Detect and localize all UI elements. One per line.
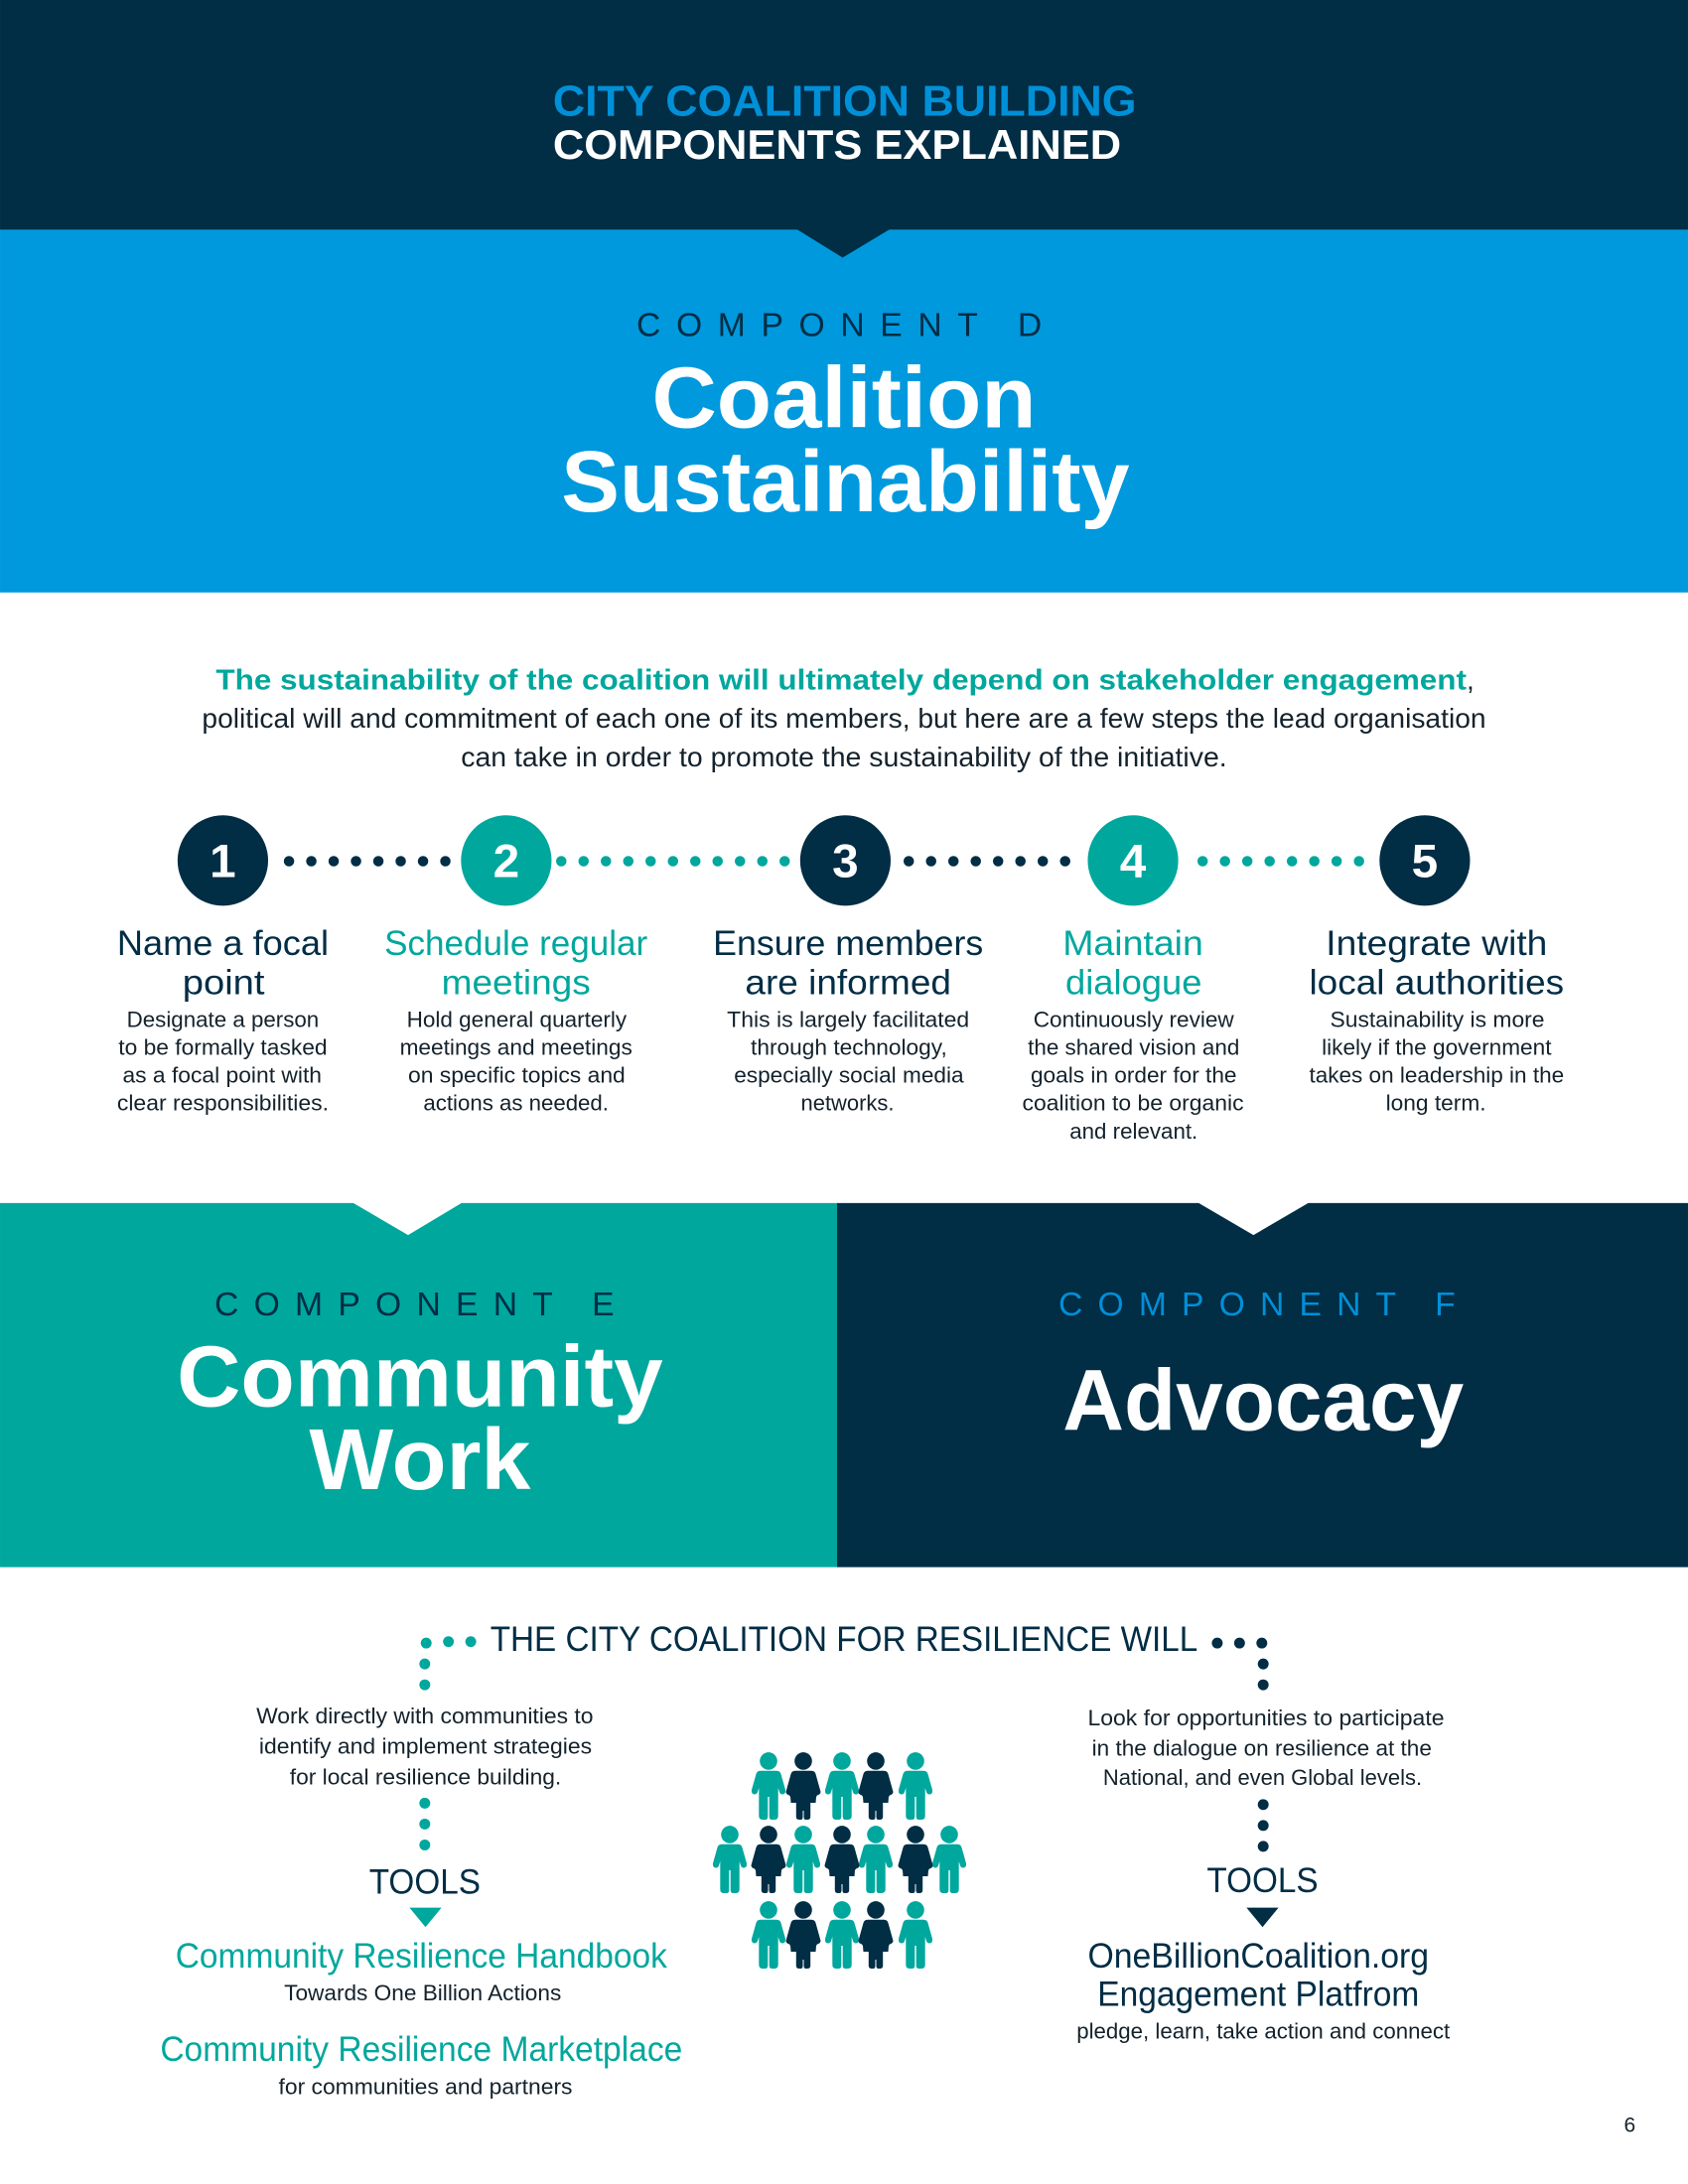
advocacy description: National, and even Global levels.: [1103, 1765, 1422, 1790]
step 1 heading: point: [183, 963, 265, 1002]
icon: people group: [713, 1752, 966, 1969]
component F heading: Advocacy: [1062, 1352, 1464, 1448]
tool: engagement platform: pledge, learn, take action and connect: [1076, 2018, 1451, 2043]
step 3 description: This is largely facilitated: [727, 1008, 969, 1032]
panel: component E: [0, 1201, 837, 1568]
step 2 heading: Schedule regular: [384, 924, 648, 963]
step 2 heading: meetings: [442, 963, 591, 1002]
title: [553, 77, 1137, 168]
step 1 heading: [117, 924, 329, 1002]
step 4: [1023, 815, 1244, 1144]
step 2 description: [400, 1008, 633, 1116]
step 1 description: to be formally tasked: [118, 1035, 328, 1060]
intro text block: [202, 664, 1486, 772]
community work description: [256, 1704, 594, 1790]
right tools arrow: [1246, 1908, 1279, 1927]
step 5 description: Sustainability is more: [1331, 1008, 1545, 1032]
tool: handbook: Community Resilience Handbook: [176, 1937, 667, 1976]
step 5 badge: [1379, 815, 1470, 905]
step 1 heading: Name a focal: [117, 924, 329, 963]
notch E: [351, 1201, 464, 1235]
step 4 heading: Maintain: [1062, 924, 1203, 963]
advocacy description: in the dialogue on resilience at the: [1092, 1736, 1432, 1761]
title: COMPONENTS EXPLAINED: [553, 121, 1121, 168]
tool: marketplace: [160, 2030, 682, 2099]
step 1: [117, 815, 329, 1116]
step 4 description: goals in order for the: [1031, 1063, 1237, 1088]
tool: engagement platform: OneBillionCoalition.org: [1087, 1937, 1429, 1976]
tool: handbook: [176, 1937, 667, 2005]
step 3 badge: [800, 815, 891, 905]
step 3 heading: are informed: [745, 963, 951, 1002]
step 3 description: through technology,: [751, 1035, 947, 1060]
step 4 description: Continuously review: [1034, 1008, 1235, 1032]
step 4 badge: 4: [1120, 836, 1147, 888]
tool: marketplace: for communities and partners: [279, 2074, 572, 2099]
page number: 6: [1623, 2114, 1635, 2136]
advocacy description: Look for opportunities to participate: [1087, 1706, 1445, 1730]
dotted connector 4 to 5: [1202, 858, 1359, 865]
community work description: for local resilience building.: [290, 1765, 561, 1790]
step 1 description: as a focal point with: [122, 1063, 322, 1088]
step 1 description: [117, 1008, 329, 1116]
header pointer arrow: [795, 228, 892, 257]
left tools arrow: [409, 1908, 442, 1927]
left tools label: TOOLS: [369, 1863, 481, 1902]
step 2 heading: [384, 924, 648, 1002]
step 3: [713, 815, 983, 1116]
step 3 badge: 3: [832, 836, 859, 888]
dotted connector left lower: [419, 1798, 430, 1850]
intro text block: can take in order to promote the sustainability of the initiative.: [461, 742, 1227, 772]
dotted connector left top: [419, 1636, 477, 1691]
step 5: [1309, 815, 1564, 1116]
panel: component D: [0, 228, 1688, 593]
step 3 description: [727, 1008, 969, 1116]
step 4 description: [1023, 1008, 1244, 1144]
step 4 heading: [1062, 924, 1203, 1002]
intro text block: ,: [1467, 664, 1475, 695]
step 1 badge: [178, 815, 268, 905]
step 2: [384, 815, 648, 1116]
step 5 heading: [1309, 924, 1564, 1002]
step 3 description: especially social media: [734, 1063, 964, 1088]
component E label: COMPONENT E: [214, 1287, 615, 1323]
step 2 badge: 2: [493, 836, 519, 888]
step 5 heading: local authorities: [1309, 963, 1564, 1002]
notch F: [1196, 1201, 1311, 1235]
component E heading: Community: [177, 1329, 663, 1426]
advocacy description: [1087, 1706, 1445, 1790]
step 1 description: Designate a person: [127, 1008, 319, 1032]
step 3 description: networks.: [801, 1091, 894, 1116]
tool: marketplace: Community Resilience Marketplace: [160, 2030, 682, 2069]
step 4 description: and relevant.: [1069, 1119, 1197, 1144]
step 3 heading: Ensure members: [713, 924, 983, 963]
step 4 description: the shared vision and: [1028, 1035, 1239, 1060]
step 5 heading: Integrate with: [1326, 924, 1547, 963]
community work description: identify and implement strategies: [259, 1734, 592, 1759]
dotted connector 2 to 3: [561, 858, 785, 865]
step 5 badge: 5: [1412, 836, 1438, 888]
step 5 description: takes on leadership in the: [1309, 1063, 1564, 1088]
tool: handbook: Towards One Billion Actions: [284, 1980, 561, 2005]
title: CITY COALITION BUILDING: [553, 77, 1137, 125]
step 4 description: coalition to be organic: [1023, 1091, 1244, 1116]
step 2 badge: [461, 815, 551, 905]
tool: engagement platform: [1076, 1937, 1451, 2043]
tool: engagement platform: Engagement Platfrom: [1097, 1975, 1419, 2013]
component F label: COMPONENT F: [1058, 1287, 1456, 1323]
dotted connector right lower: [1258, 1799, 1269, 1851]
step 1 badge: 1: [210, 836, 236, 888]
header band: [0, 0, 1688, 229]
step 5 description: long term.: [1386, 1091, 1486, 1116]
step 3 heading: [713, 924, 983, 1002]
section heading: THE CITY COALITION FOR RESILIENCE WILL: [491, 1620, 1197, 1659]
component D heading: Coalition: [651, 350, 1037, 447]
component E heading: Work: [309, 1412, 531, 1508]
dotted connector 3 to 4: [909, 858, 1065, 865]
dotted connector 1 to 2: [289, 858, 447, 865]
component D heading: Sustainability: [561, 434, 1130, 530]
step 4 badge: [1087, 815, 1179, 905]
step 2 description: on specific topics and: [408, 1063, 626, 1088]
intro text block: The sustainability of the coalition will ultimately depend on stakeholder engagement: [215, 664, 1467, 696]
step 4 heading: dialogue: [1065, 963, 1201, 1002]
intro text block: political will and commitment of each one of its members, but here are a few steps the lead organisation: [202, 703, 1486, 734]
left column: community work: [160, 1704, 682, 2099]
step 2 description: meetings and meetings: [400, 1035, 633, 1060]
step 1 description: clear responsibilities.: [117, 1091, 329, 1116]
step 2 description: Hold general quarterly: [407, 1008, 628, 1032]
step 2 description: actions as needed.: [423, 1091, 609, 1116]
dotted connector right top: [1211, 1638, 1269, 1691]
step 5 description: likely if the government: [1322, 1035, 1552, 1060]
component E heading: [177, 1329, 663, 1508]
component D heading: [561, 350, 1130, 530]
right column: advocacy: [1076, 1706, 1451, 2043]
panel: component F: [837, 1201, 1688, 1568]
community work description: Work directly with communities to: [256, 1704, 594, 1728]
component D label: COMPONENT D: [636, 308, 1042, 344]
right tools label: TOOLS: [1206, 1861, 1319, 1900]
step 5 description: [1309, 1008, 1564, 1116]
